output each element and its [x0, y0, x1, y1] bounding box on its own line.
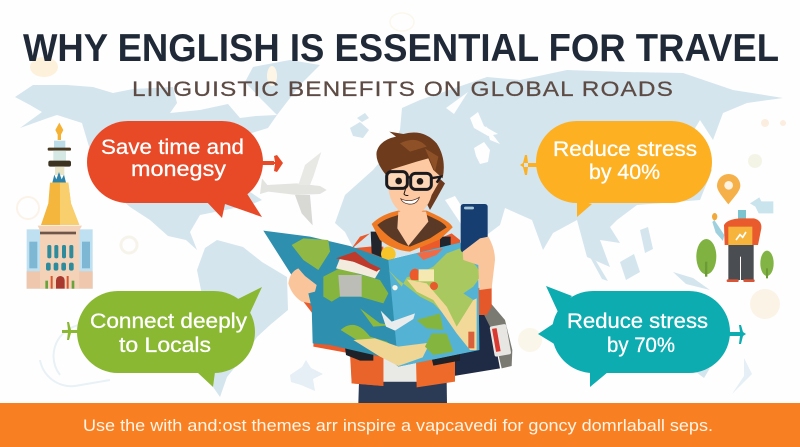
- red speech bubble: save time and money: monegsy: [131, 157, 226, 181]
- footer text: Use the with and:ost themes arr inspire a vapcavedi for goncy domrlaball seps.: [83, 416, 713, 435]
- head: [376, 132, 445, 217]
- phone: [461, 204, 488, 252]
- legs: [358, 382, 447, 403]
- green speech bubble: connect deeply to locals: [62, 287, 262, 387]
- subtitle: LINGUISTIC BENEFITS ON GLOBAL ROADS: [132, 77, 674, 101]
- right traveller figure with pin and trees: [696, 174, 774, 282]
- orange speech bubble: reduce stress by 40%: [520, 121, 712, 217]
- open map: [263, 231, 482, 367]
- white airplane: [260, 152, 327, 225]
- teal speech bubble: reduce stress by 70%: Reduce stress: [567, 309, 708, 333]
- teal speech bubble: reduce stress by 70%: [538, 286, 746, 387]
- landmark tower illustration: [27, 123, 93, 289]
- red speech bubble: save time and money: Save time and: [101, 135, 244, 159]
- left hand: [288, 268, 317, 303]
- teal speech bubble: reduce stress by 70%: by 70%: [607, 333, 675, 357]
- footer bar: [0, 403, 800, 447]
- right hand: [463, 237, 495, 290]
- green speech bubble: connect deeply to locals: Connect deeply: [90, 309, 247, 333]
- orange speech bubble: reduce stress by 40%: by 40%: [589, 160, 660, 184]
- orange speech bubble: reduce stress by 40%: Reduce stress: [553, 137, 697, 161]
- world map background: [15, 60, 783, 397]
- red speech bubble: save time and money: [87, 121, 283, 218]
- traveller holding map and phone: [263, 132, 512, 403]
- backpack: [450, 298, 512, 377]
- white gaps in Eurasia: [445, 92, 500, 224]
- jacket: [303, 211, 492, 387]
- green speech bubble: connect deeply to locals: to Locals: [119, 333, 211, 357]
